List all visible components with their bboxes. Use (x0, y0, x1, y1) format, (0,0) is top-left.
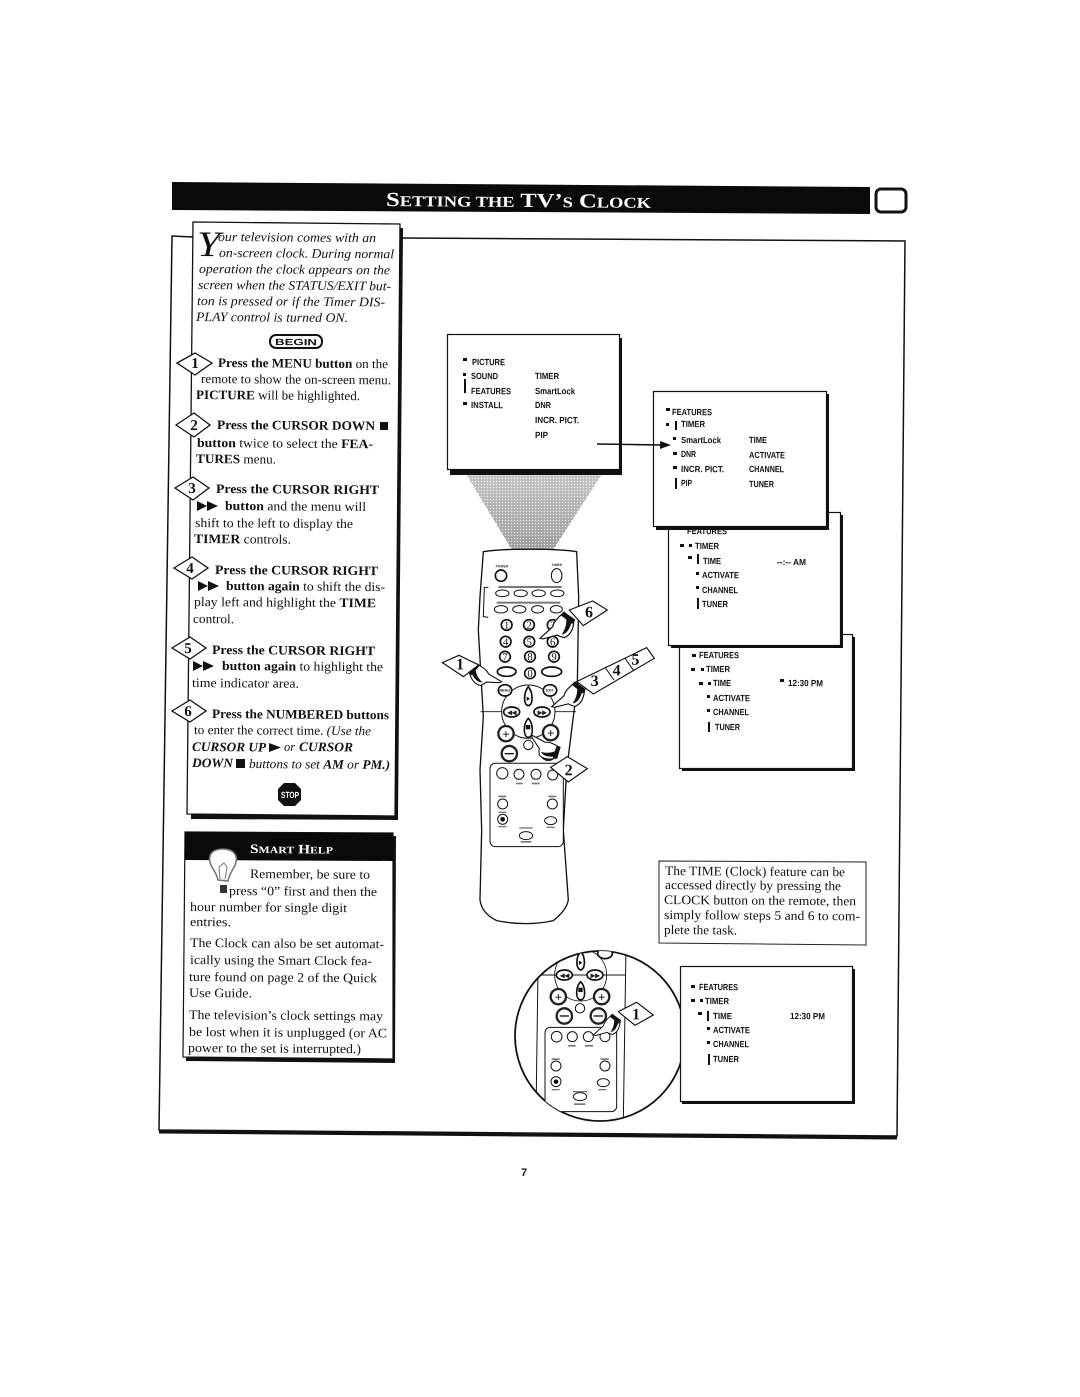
screen 1: main menu: SOUND (471, 371, 498, 381)
remote control (442, 549, 654, 924)
number keypad: 3 (550, 621, 555, 632)
screen 5: clock result: ACTIVATE (713, 1025, 750, 1035)
screen 2: features menu: INCR. PICT. (681, 464, 724, 474)
callout: hand and step 6: 6 (585, 604, 593, 621)
step 4: play left and highlight the TIME (194, 594, 376, 610)
callout: hand and step 2: 2 (565, 762, 573, 779)
screen 1: main menu: PICTURE (472, 357, 505, 367)
screen 4: time set: FEATURES (699, 650, 739, 660)
screen 5: clock result: CHANNEL (713, 1039, 749, 1049)
callout: hand and steps 3 4 5: 4 (613, 662, 621, 679)
step 6: or (284, 739, 296, 754)
callout: hand and step 2 (525, 727, 587, 782)
step 6: CURSOR UP (192, 739, 267, 755)
title bar: SETTING THE TV’ S C LOCK (386, 189, 652, 213)
screen 3: timer controls: FEATURES (687, 526, 727, 536)
screen 5: clock result: TIME (713, 1011, 732, 1021)
step 2 (176, 413, 388, 467)
remote top buttons: POWER (496, 564, 509, 568)
step 4: button again to shift the dis- (226, 578, 385, 594)
inset remote edges (536, 947, 626, 1120)
screen 3: timer controls: TUNER (702, 599, 728, 609)
step 2: TURES menu. (196, 451, 276, 467)
smart help text: hour number for single digit (190, 899, 348, 915)
note: direct clock access: plete the task. (664, 922, 737, 938)
number keypad: 9 (551, 652, 557, 663)
intro text: operation the clock appears on the (199, 261, 390, 277)
cursor controls: MENU (499, 689, 510, 693)
number keypad: 0 (527, 669, 533, 680)
step 6: 6 (184, 704, 192, 720)
panel: smart help (183, 832, 396, 1063)
light cone from remote to screen (466, 474, 602, 550)
screen 1: main menu: INSTALL (471, 400, 503, 410)
screen 3: timer controls: ACTIVATE (702, 570, 739, 580)
number keypad: 2 (526, 621, 532, 632)
inset buttons (545, 948, 617, 1112)
inset buttons: + (598, 990, 605, 1004)
smart help text: ture found on page 2 of the Quick (189, 969, 378, 985)
screen 5: clock result (680, 966, 855, 1104)
screen 5: clock result: TUNER (713, 1054, 739, 1064)
remote top buttons (483, 563, 564, 617)
screen 4: time set: TUNER (715, 722, 740, 732)
callout: hand and steps 3 4 5: 5 (631, 652, 639, 669)
step 3: Press the CURSOR RIGHT (216, 481, 379, 497)
step 2: button twice to select the FEA- (197, 435, 373, 451)
screen 1: main menu: TIMER (535, 371, 559, 381)
step 3: shift to the left to display the (195, 515, 353, 531)
arrow: menu to features screen (597, 441, 671, 449)
smart help text: Remember, be sure to (250, 866, 370, 882)
panel: intro and steps (172, 222, 403, 820)
intro text: PLAY control is turned ON. (195, 309, 348, 325)
smart help text: press “0” first and then the (229, 883, 377, 899)
inset buttons: ▶▶ (590, 972, 600, 979)
number keypad: 7 (502, 652, 508, 663)
begin badge: BEGIN (275, 337, 317, 347)
remote body (478, 549, 579, 924)
screen 1: main menu: PIP (535, 430, 548, 440)
drop cap: Y (197, 224, 225, 264)
screen 5: clock result: 12:30 PM (790, 1011, 825, 1021)
step 2: Press the CURSOR DOWN (217, 417, 376, 433)
smart help text: ically using the Smart Clock fea- (190, 952, 372, 968)
smart help text: Use Guide. (189, 985, 252, 1000)
step 1 (177, 353, 391, 403)
step 1: PICTURE will be highlighted. (196, 387, 360, 403)
callout: hand and step 1: 1 (456, 656, 464, 673)
step 6: buttons to set AM or PM.) (249, 756, 390, 772)
number keypad: 5 (527, 637, 532, 648)
note: direct clock access: simply follow steps 5 and 6 to com- (664, 907, 860, 923)
callout: inset hand and step 1: 1 (632, 1006, 640, 1023)
smart help text: The television’s clock settings may (189, 1007, 384, 1023)
cursor controls: EXIT (546, 689, 555, 693)
screen 2: features menu: TUNER (749, 479, 774, 489)
note: direct clock access: accessed directly by pressing the (665, 877, 841, 893)
number keypad: 8 (527, 652, 533, 663)
screen 4: time set (680, 634, 855, 771)
number keypad: 6 (550, 637, 556, 648)
screen 1: main menu: SmartLock (535, 386, 576, 396)
screen 2: features menu: SmartLock (681, 435, 722, 445)
intro text: ton is pressed or if the Timer DIS- (197, 293, 385, 309)
step 2: 2 (190, 418, 198, 434)
number keypad: 4 (503, 637, 509, 648)
step 4: Press the CURSOR RIGHT (215, 562, 378, 578)
cursor controls: ▶▶ (537, 709, 547, 716)
step 5: button again to highlight the (222, 658, 383, 674)
callout: hand and step 1 (442, 655, 505, 691)
callout: hand and steps 3 4 5 (546, 648, 654, 716)
screen 3: timer controls (668, 512, 843, 648)
intro text: our television comes with an (218, 229, 376, 245)
screen 2: features menu: DNR (681, 449, 696, 459)
step 6: to enter the correct time. (Use the (194, 722, 371, 738)
screen 2: features menu (654, 392, 829, 530)
step 3: button and the menu will (225, 498, 367, 514)
screen 2: features menu: ACTIVATE (749, 450, 785, 460)
screen 3: timer controls: --:-- AM (777, 557, 806, 567)
cursor controls: + (502, 727, 510, 741)
note: direct clock access: CLOCK button on the remote, then (664, 892, 857, 908)
magnified remote inset (515, 947, 685, 1121)
screen 4: time set: TIME (713, 678, 731, 688)
smart help text: be lost when it is unplugged (or AC (189, 1024, 387, 1040)
remote top buttons: TIMER (552, 563, 563, 567)
smart help header (185, 832, 393, 861)
screen 1: main menu: INCR. PICT. (535, 415, 579, 425)
main content frame (159, 236, 905, 1138)
step 5: Press the CURSOR RIGHT (212, 642, 375, 658)
cursor controls (481, 685, 576, 761)
screen 2: features menu: PIP (681, 478, 692, 488)
step 6: Press the NUMBERED buttons (212, 706, 389, 722)
icon: stop sign: STOP (281, 790, 299, 800)
intro text: screen when the STATUS/EXIT but- (198, 277, 391, 293)
number keypad: 1 (504, 621, 509, 632)
step 4 (174, 557, 385, 626)
callout: hand and step 6 (534, 601, 607, 648)
step 3 (175, 477, 379, 547)
smart help text: power to the set is interrupted.) (188, 1040, 361, 1056)
lower button panel (490, 763, 563, 847)
screen 4: time set: CHANNEL (713, 707, 749, 717)
step 6: DOWN (191, 755, 234, 770)
inset buttons: ◀◀ (559, 972, 570, 979)
intro text: on-screen clock. During normal (219, 245, 394, 261)
screen 1: main menu (448, 334, 622, 475)
smart help text: entries. (190, 914, 231, 929)
callout: inset hand and step 1 (589, 1002, 653, 1043)
icon: stop sign (278, 783, 301, 806)
step 1: 1 (191, 356, 199, 372)
screen 2: features menu: TIMER (681, 419, 705, 429)
callout: hand and steps 3 4 5: 3 (591, 673, 599, 690)
step 3: TIMER controls. (194, 531, 291, 547)
screen 5: clock result: TIMER (705, 996, 729, 1006)
inset buttons: + (555, 990, 562, 1004)
number keypad (497, 620, 562, 680)
step 4: control. (193, 611, 234, 626)
screen 1: main menu: FEATURES (471, 386, 511, 396)
note: direct clock access: The TIME (Clock) feature can be (665, 863, 845, 879)
step 1: Press the MENU button on the (218, 355, 388, 371)
page number: 7 (521, 1167, 527, 1179)
screen 3: timer controls: CHANNEL (702, 585, 738, 595)
step 5 (172, 637, 383, 691)
screen 2: features menu: FEATURES (672, 407, 712, 417)
screen 4: time set: TIMER (706, 664, 730, 674)
step 6 (172, 700, 390, 772)
screen 3: timer controls: TIME (703, 556, 721, 566)
icon: tv screen (876, 189, 906, 212)
screen 4: time set: ACTIVATE (713, 693, 750, 703)
begin badge (270, 335, 322, 348)
intro text (195, 229, 394, 325)
smart help text (188, 866, 387, 1056)
step 5: time indicator area. (192, 675, 299, 691)
cursor controls: ◀◀ (506, 709, 517, 716)
screen 3: timer controls: TIMER (695, 541, 719, 551)
icon: light bulb (210, 849, 236, 893)
smart help header: SMART HELP (250, 841, 333, 857)
step 3: 3 (188, 481, 196, 497)
smart help text: The Clock can also be set automat- (190, 935, 384, 951)
step 4: 4 (186, 561, 194, 577)
screen 5: clock result: FEATURES (699, 982, 738, 992)
screen 2: features menu: CHANNEL (749, 464, 784, 474)
title bar (172, 182, 870, 214)
screen 4: time set: 12:30 PM (788, 678, 823, 688)
cursor controls: + (547, 726, 554, 740)
step 5: 5 (184, 641, 192, 657)
step 6: CURSOR (299, 739, 353, 754)
note: direct clock access (659, 861, 866, 945)
screen 1: main menu: DNR (535, 400, 551, 410)
step 1: remote to show the on-screen menu. (201, 371, 391, 387)
screen 2: features menu: TIME (749, 435, 767, 445)
